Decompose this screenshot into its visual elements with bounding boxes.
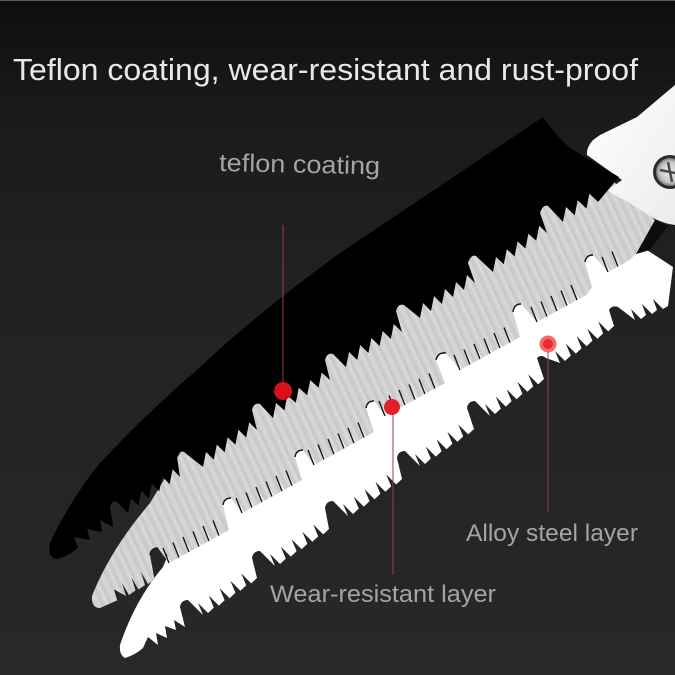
callout: alloy steel layer — [466, 336, 638, 547]
wear-resistant layer: steel blade — [92, 150, 662, 608]
icon: screw — [653, 155, 675, 189]
title: Teflon coating, wear-resistant and rust-proof — [13, 52, 638, 87]
callout: teflon coating: teflon coating — [219, 149, 380, 180]
callout: alloy steel layer: Alloy steel layer — [466, 520, 638, 547]
folding handle — [587, 85, 675, 225]
callout: teflon coating — [219, 149, 380, 400]
saw blade illustration — [49, 85, 675, 658]
teflon coating: black blade — [49, 117, 619, 559]
handle end shadow — [636, 220, 668, 254]
alloy steel layer: white blade — [120, 245, 673, 658]
callout: wear-resistant layer — [270, 399, 496, 608]
steel blade tooth slits — [115, 252, 628, 600]
callout: wear-resistant layer: Wear-resistant layer — [270, 581, 496, 608]
